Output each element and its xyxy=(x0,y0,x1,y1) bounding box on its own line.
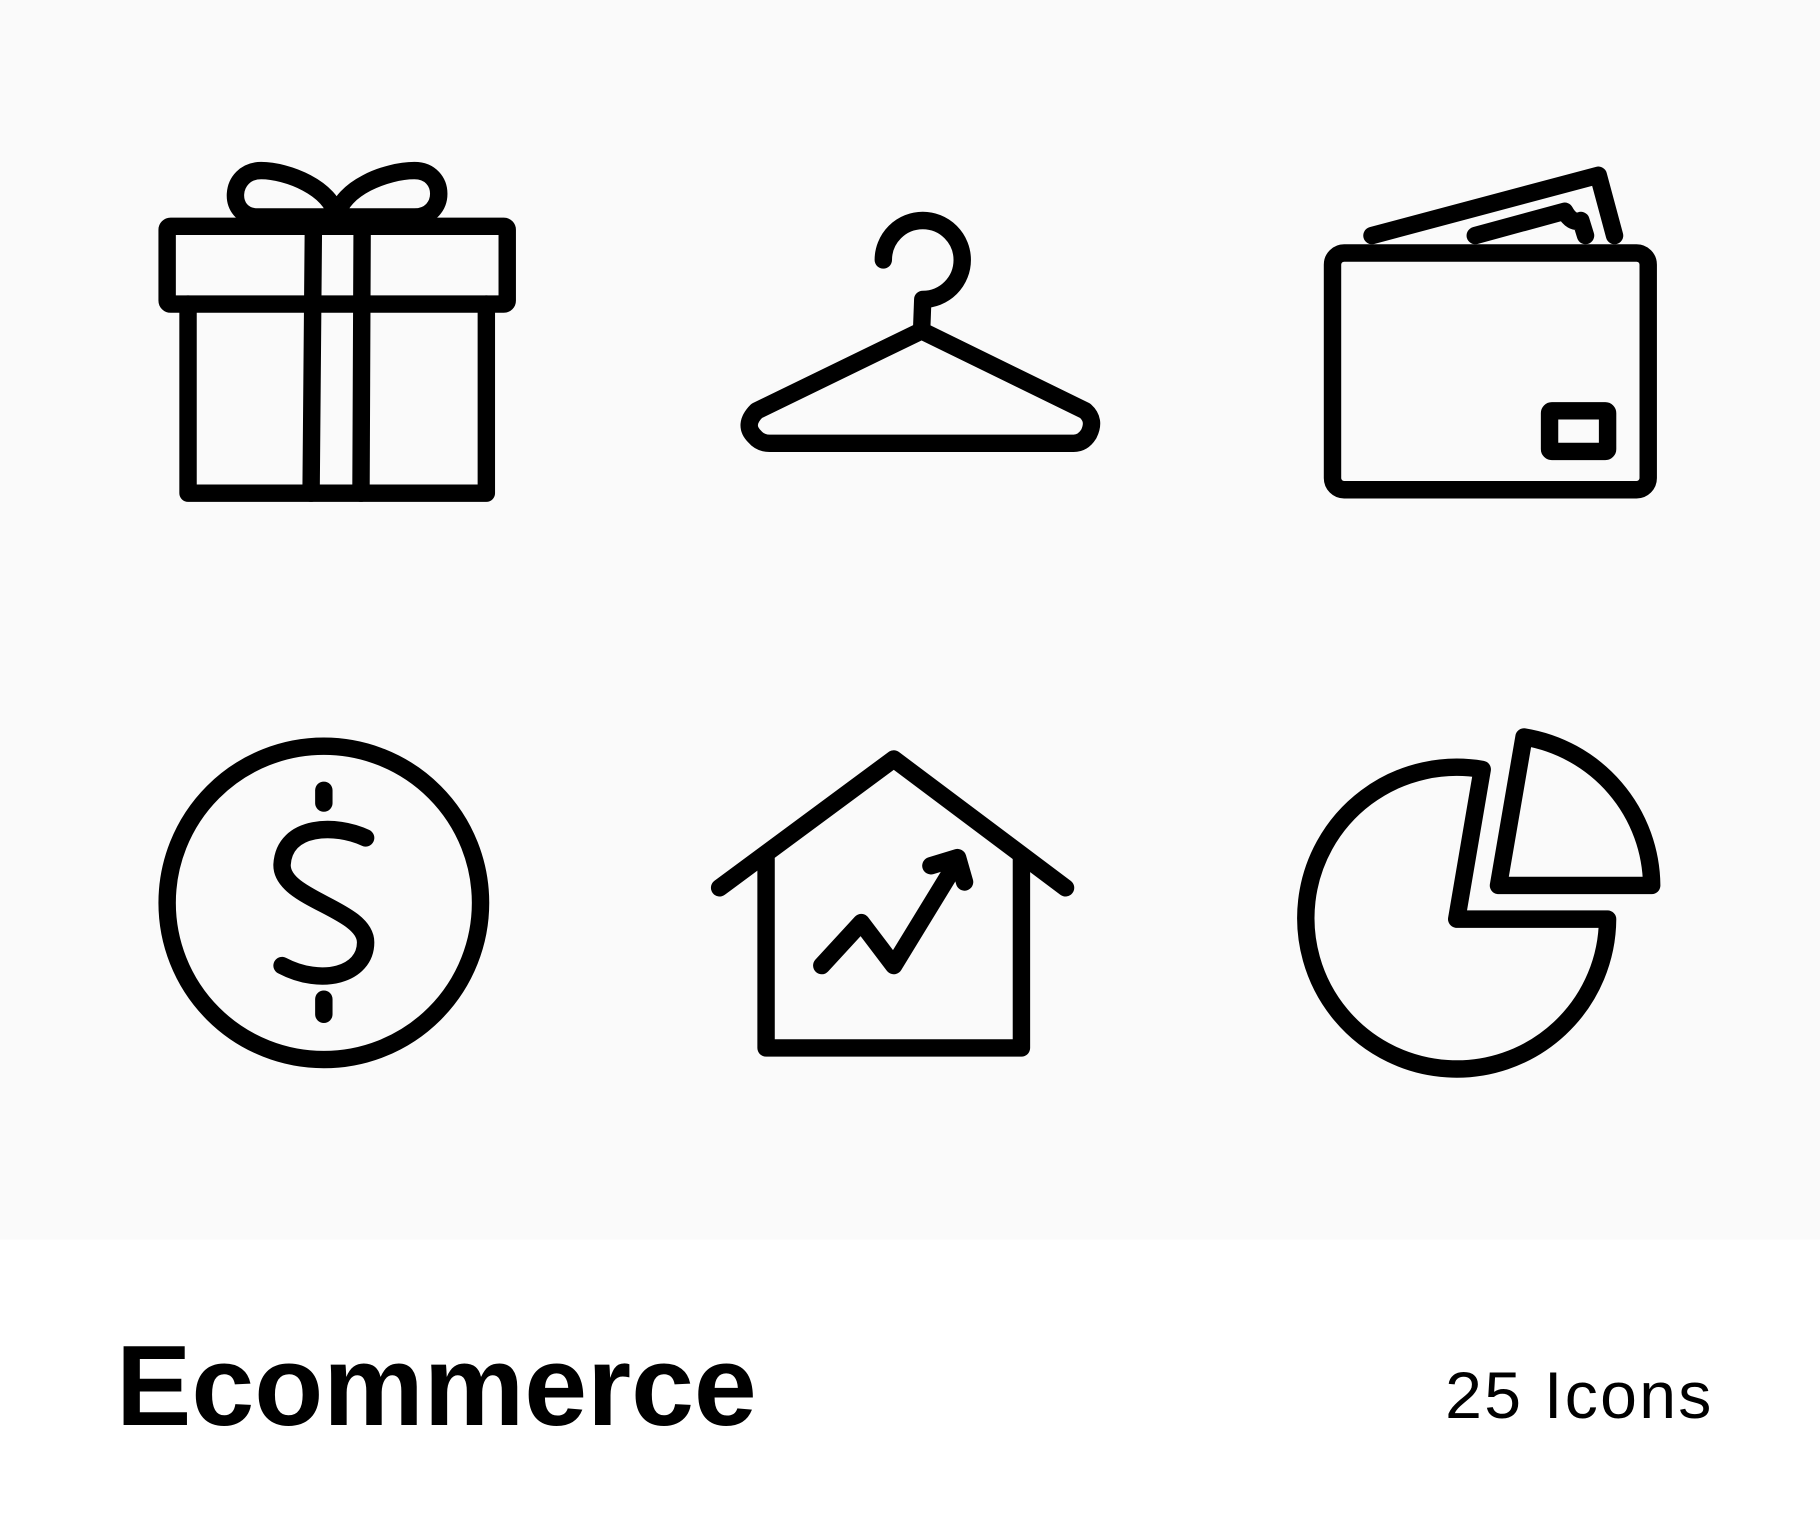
icon: pie chart xyxy=(1306,737,1652,1069)
icon count: 25 Icons xyxy=(1445,1359,1714,1433)
icon: clothes hanger xyxy=(749,220,1092,443)
title: Ecommerce xyxy=(116,1323,757,1450)
icon: house with growth chart xyxy=(720,759,1066,1048)
icon: wallet xyxy=(1332,175,1648,490)
icon: dollar coin xyxy=(167,746,481,1060)
icon: gift box xyxy=(167,171,507,493)
